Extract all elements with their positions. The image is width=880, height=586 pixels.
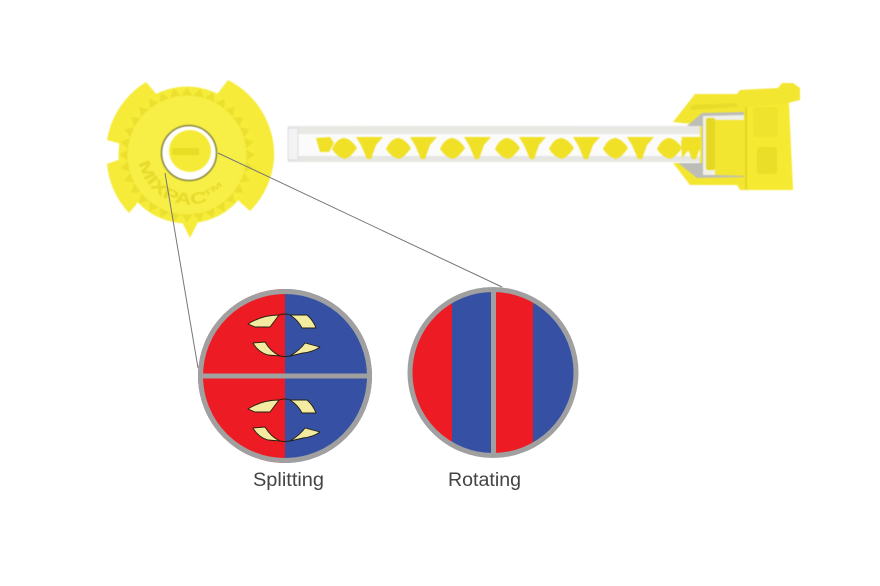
icon: static mixer side view <box>288 83 800 190</box>
disc inner face <box>128 96 246 214</box>
splitting blue half <box>285 289 372 463</box>
cap wall shadow <box>745 107 747 190</box>
cap top band stripe <box>690 103 737 110</box>
mixing elements <box>316 136 708 159</box>
outlet ring <box>162 126 216 180</box>
cap plunger body <box>715 120 747 176</box>
cap lower recess <box>757 147 777 174</box>
splitting red half <box>198 289 285 463</box>
rotating border <box>410 290 576 456</box>
disc outer tabs <box>107 80 274 238</box>
outlet slot <box>172 148 199 155</box>
splitting divider <box>198 374 372 378</box>
leader line: to rotating view <box>218 153 502 287</box>
cap body <box>673 83 800 190</box>
cap side wall <box>745 103 793 190</box>
panel: rotating diagram <box>408 287 579 459</box>
splitting label: Splitting <box>253 470 324 491</box>
cap upper recess <box>753 107 778 137</box>
panel: splitting diagram <box>198 289 372 463</box>
disc body <box>118 86 256 224</box>
disc gear teeth <box>119 87 255 223</box>
rotation arrows: lower <box>248 399 320 442</box>
mixer tube <box>288 125 702 162</box>
leader line: to splitting view <box>165 173 198 368</box>
rotating label: Rotating <box>448 470 521 491</box>
cap window <box>678 112 744 178</box>
splitting border <box>200 292 370 460</box>
cap plunger flange <box>706 118 715 170</box>
brand lettering: MIXPAC™ <box>138 160 222 205</box>
cap window inner <box>703 115 744 175</box>
rotating stripes <box>412 292 574 453</box>
rotation arrows: upper <box>248 314 320 356</box>
icon: mixer end view disc <box>106 80 275 238</box>
outlet nozzle <box>169 130 211 172</box>
